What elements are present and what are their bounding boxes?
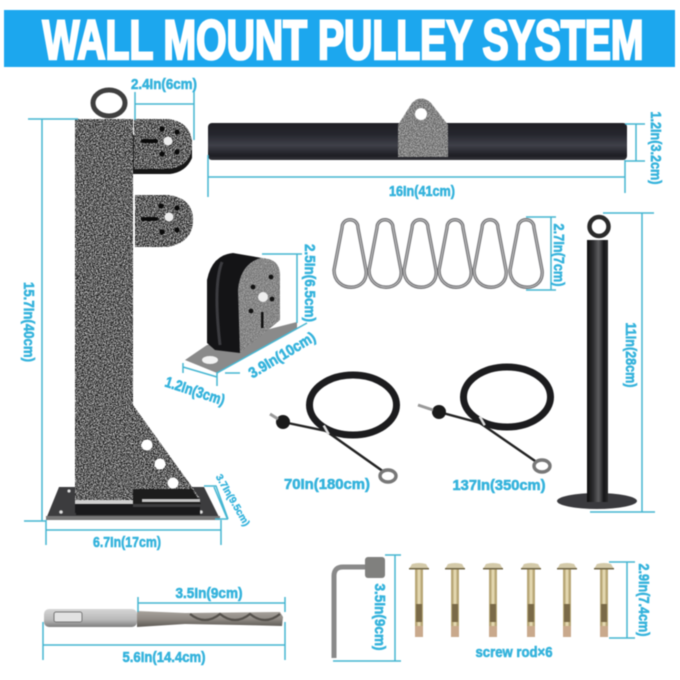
base plate [46,487,220,520]
hex wrench [334,557,385,658]
pulley plate [238,258,280,353]
dimension: wrench [333,555,401,661]
dimension: drill flute [138,585,285,612]
label: 137 inch: 137In(350cm) [452,477,546,494]
dimension: drill length: 5.6In(14.4cm) [122,649,206,666]
drill bit [44,609,283,627]
dimension: bar diameter [625,112,664,184]
wall mount bracket post [46,90,220,520]
label: 70 inch: 70In(180cm) [284,476,370,493]
stopper ball [432,405,446,419]
dimension: pulley length [217,323,319,382]
cable eyelet [534,460,550,472]
cable 70 inch [270,375,396,482]
dimension: tab width [131,76,197,140]
pin tube [587,240,608,502]
dimension: pin height: 11In(28cm) [622,322,639,388]
lat bar [208,98,627,160]
bar bracket [398,98,448,157]
title banner [4,8,675,71]
gusset [133,405,201,504]
dimension: tab width: 2.4In(6cm) [131,76,197,93]
drill shank [44,609,137,627]
dimension: bar diameter: 1.2In(3.2cm) [647,112,664,184]
dimension: pulley width: 1.2In(3cm) [163,374,227,409]
cable eyelet [380,470,396,482]
dimension: base width [46,520,221,551]
wrench socket [365,557,385,578]
pin base [557,493,637,509]
cable coil [310,375,396,435]
bar tube [208,123,627,160]
stopper ball [276,415,290,429]
drill flute [137,611,283,627]
dimension: pulley length: 3.9In(10cm) [246,329,319,382]
dimension: carabiner [526,217,567,290]
post body [75,119,133,513]
expansion screws [409,563,614,637]
label: screw rod: screw rod×6 [476,644,552,661]
dimension: base depth: 3.7In(9.5cm) [213,473,251,528]
dimension: pulley height: 2.5In(6.5cm) [301,244,318,322]
dimension: screw: 2.9In(7.4cm) [635,564,652,636]
dimension: drill length [43,622,285,666]
dimension: screw [609,562,652,638]
dimension: pulley width [163,363,227,409]
pulley base [185,322,297,373]
upper tab [133,119,192,174]
loading pin [557,217,637,509]
dimension: carabiner: 2.7In(7cm) [550,224,567,286]
pin ring [590,217,608,236]
pulley block [185,253,297,373]
lower tab [135,195,193,247]
cable coil [464,367,550,427]
pulley wheel [207,253,262,353]
dimension: wrench: 3.5In(9cm) [371,584,388,650]
eye ring [93,90,125,116]
dimension: pin height [590,213,655,512]
dimension: bar length: 16In(41cm) [389,183,455,200]
cable 137 inch [418,367,550,472]
dimension: drill flute: 3.5In(9cm) [176,585,242,602]
dimension: base width: 6.7In(17cm) [93,534,161,551]
dimension: bar length [208,155,625,200]
dimension: pulley height [262,244,318,323]
carabiners [334,220,542,287]
dimension: post height: 15.7In(40cm) [20,282,37,362]
dimension: post height [20,119,78,521]
